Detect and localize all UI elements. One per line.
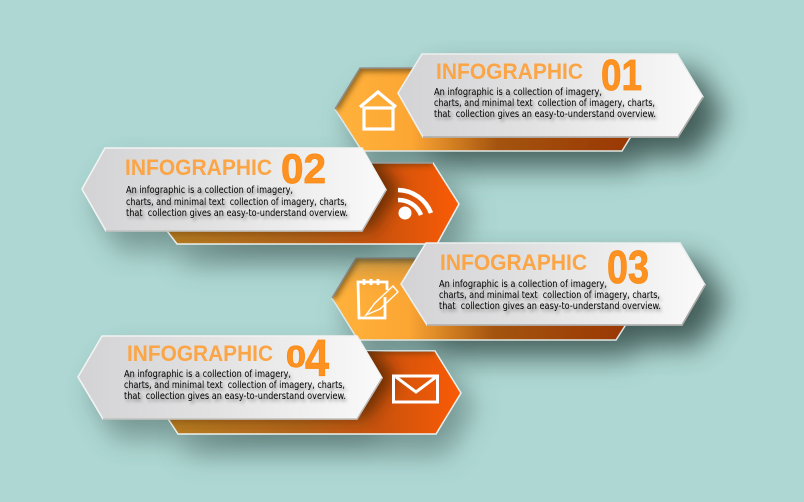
number 04	[286, 330, 329, 388]
description 2: charts, and minimal text collection of imagery, charts,	[126, 197, 347, 208]
description 3: that collection gives an easy-to-understand overview.	[439, 301, 661, 312]
infographic canvas	[77, 49, 742, 470]
description 1: An infographic is a collection of imagery,	[434, 87, 602, 98]
heading 4: INFOGRAPHIC	[127, 341, 273, 366]
description 3: charts, and minimal text collection of imagery, charts,	[439, 290, 660, 301]
icon: notepad and pencil	[358, 279, 398, 318]
description 4: that collection gives an easy-to-understand overview.	[124, 391, 346, 402]
icon: rss feed	[398, 190, 431, 220]
heading 1: INFOGRAPHIC	[436, 59, 583, 84]
description 2: An infographic is a collection of imagery,	[126, 185, 293, 196]
description 4: An infographic is a collection of imagery,	[124, 369, 291, 380]
description 2: that collection gives an easy-to-understand overview.	[126, 208, 348, 219]
number 03: 03	[607, 241, 649, 293]
icon: envelope	[394, 376, 438, 402]
number 04: 4	[305, 330, 329, 388]
row 2: label panel	[82, 145, 386, 231]
row 4: orange tab	[168, 350, 484, 470]
description 1: that collection gives an easy-to-understand overview.	[434, 109, 656, 120]
number 01: 01	[601, 51, 642, 100]
icon: house	[360, 92, 396, 129]
row 3: label panel	[401, 241, 705, 325]
description 3	[439, 279, 661, 312]
row 4: label panel	[78, 330, 382, 419]
row 1: orange tab	[335, 68, 642, 171]
row 2: orange tab	[167, 162, 482, 282]
row 1: label panel	[398, 51, 703, 137]
row 3: orange tab	[332, 258, 638, 360]
panel shadows	[90, 70, 726, 438]
description 3: An infographic is a collection of imagery,	[439, 279, 607, 290]
description 4	[124, 369, 346, 402]
number 04: 0	[286, 339, 306, 374]
description 1: charts, and minimal text collection of imagery, charts,	[434, 98, 655, 109]
heading 2: INFOGRAPHIC	[125, 155, 272, 180]
description 2	[126, 185, 348, 219]
heading 3: INFOGRAPHIC	[440, 250, 587, 275]
description 1	[434, 87, 656, 120]
number 02: 02	[281, 145, 326, 192]
description 4: charts, and minimal text collection of imagery, charts,	[124, 380, 345, 391]
